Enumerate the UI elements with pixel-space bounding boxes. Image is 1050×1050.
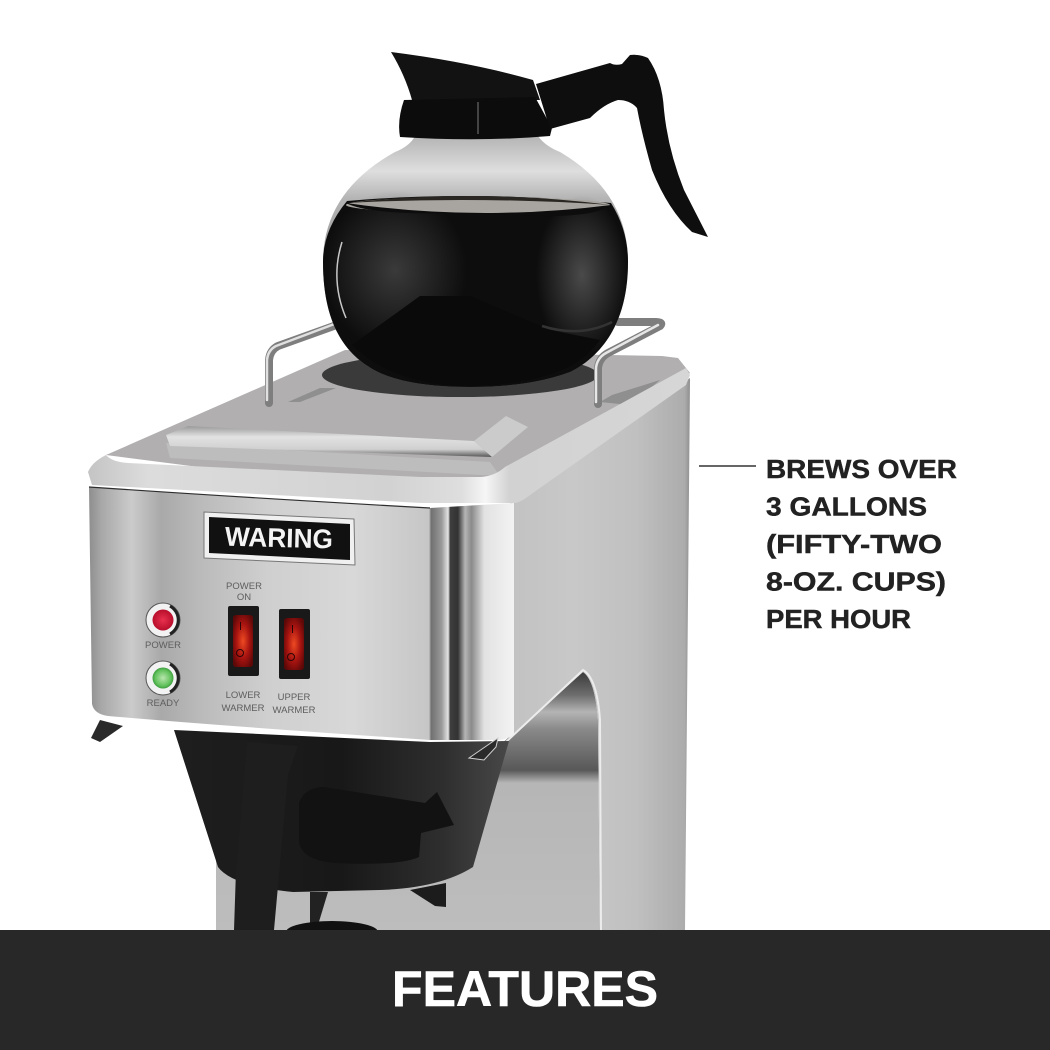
basket recess (299, 787, 454, 864)
upper warmer switch (273, 609, 316, 716)
lower glass glints (542, 322, 612, 331)
coffee maker illustration (88, 52, 708, 943)
coffee reflections (323, 190, 467, 350)
lower warmer switch (222, 581, 265, 714)
lower warmer switch: ON (237, 592, 251, 603)
callout: capacity: (FIFTY-TWO (766, 531, 942, 559)
lower warmer switch: WARMER (222, 703, 265, 714)
footer banner: FEATURES (392, 961, 658, 1017)
opening edge (506, 670, 601, 930)
ready indicator (146, 661, 180, 709)
brew basket (174, 730, 509, 943)
callout: capacity: BREWS OVER (766, 456, 957, 484)
lid collar (399, 97, 552, 139)
side panel (510, 378, 690, 930)
callout: capacity: PER HOUR (766, 606, 911, 634)
coffee (323, 196, 628, 387)
handle (536, 55, 708, 237)
warmer plate (322, 353, 598, 397)
mounting clips (91, 720, 498, 760)
brand badge: WARING (225, 522, 333, 554)
power indicator (145, 603, 181, 651)
prongs (310, 892, 328, 925)
brand badge (204, 512, 355, 565)
lower shadow (352, 296, 600, 386)
ready indicator: READY (147, 698, 180, 709)
top plate (106, 350, 690, 490)
basket handle (234, 742, 298, 930)
lid spout (391, 52, 540, 100)
collar highlight (477, 102, 479, 134)
leader line (699, 465, 756, 467)
power indicator: POWER (145, 640, 181, 651)
footer banner (0, 930, 1050, 1050)
lower column and opening interior (216, 672, 600, 930)
upper warmer switch: UPPER (278, 692, 311, 703)
lid hatch (166, 416, 528, 476)
callout: capacity: 3 GALLONS (766, 494, 927, 522)
rear rail (267, 320, 661, 404)
front panel (89, 487, 514, 740)
upper warmer switch: WARMER (273, 705, 316, 716)
lower warmer switch: POWER (226, 581, 262, 592)
callout: capacity: 8-OZ. CUPS) (766, 568, 946, 596)
glass carafe (323, 52, 708, 387)
rim of top (88, 368, 690, 503)
carafe glass (323, 136, 628, 387)
callout: capacity (766, 456, 957, 634)
rear vents (288, 380, 660, 405)
lower warmer switch: LOWER (226, 690, 261, 701)
coffee surface (346, 197, 610, 213)
carafe below (286, 921, 378, 943)
